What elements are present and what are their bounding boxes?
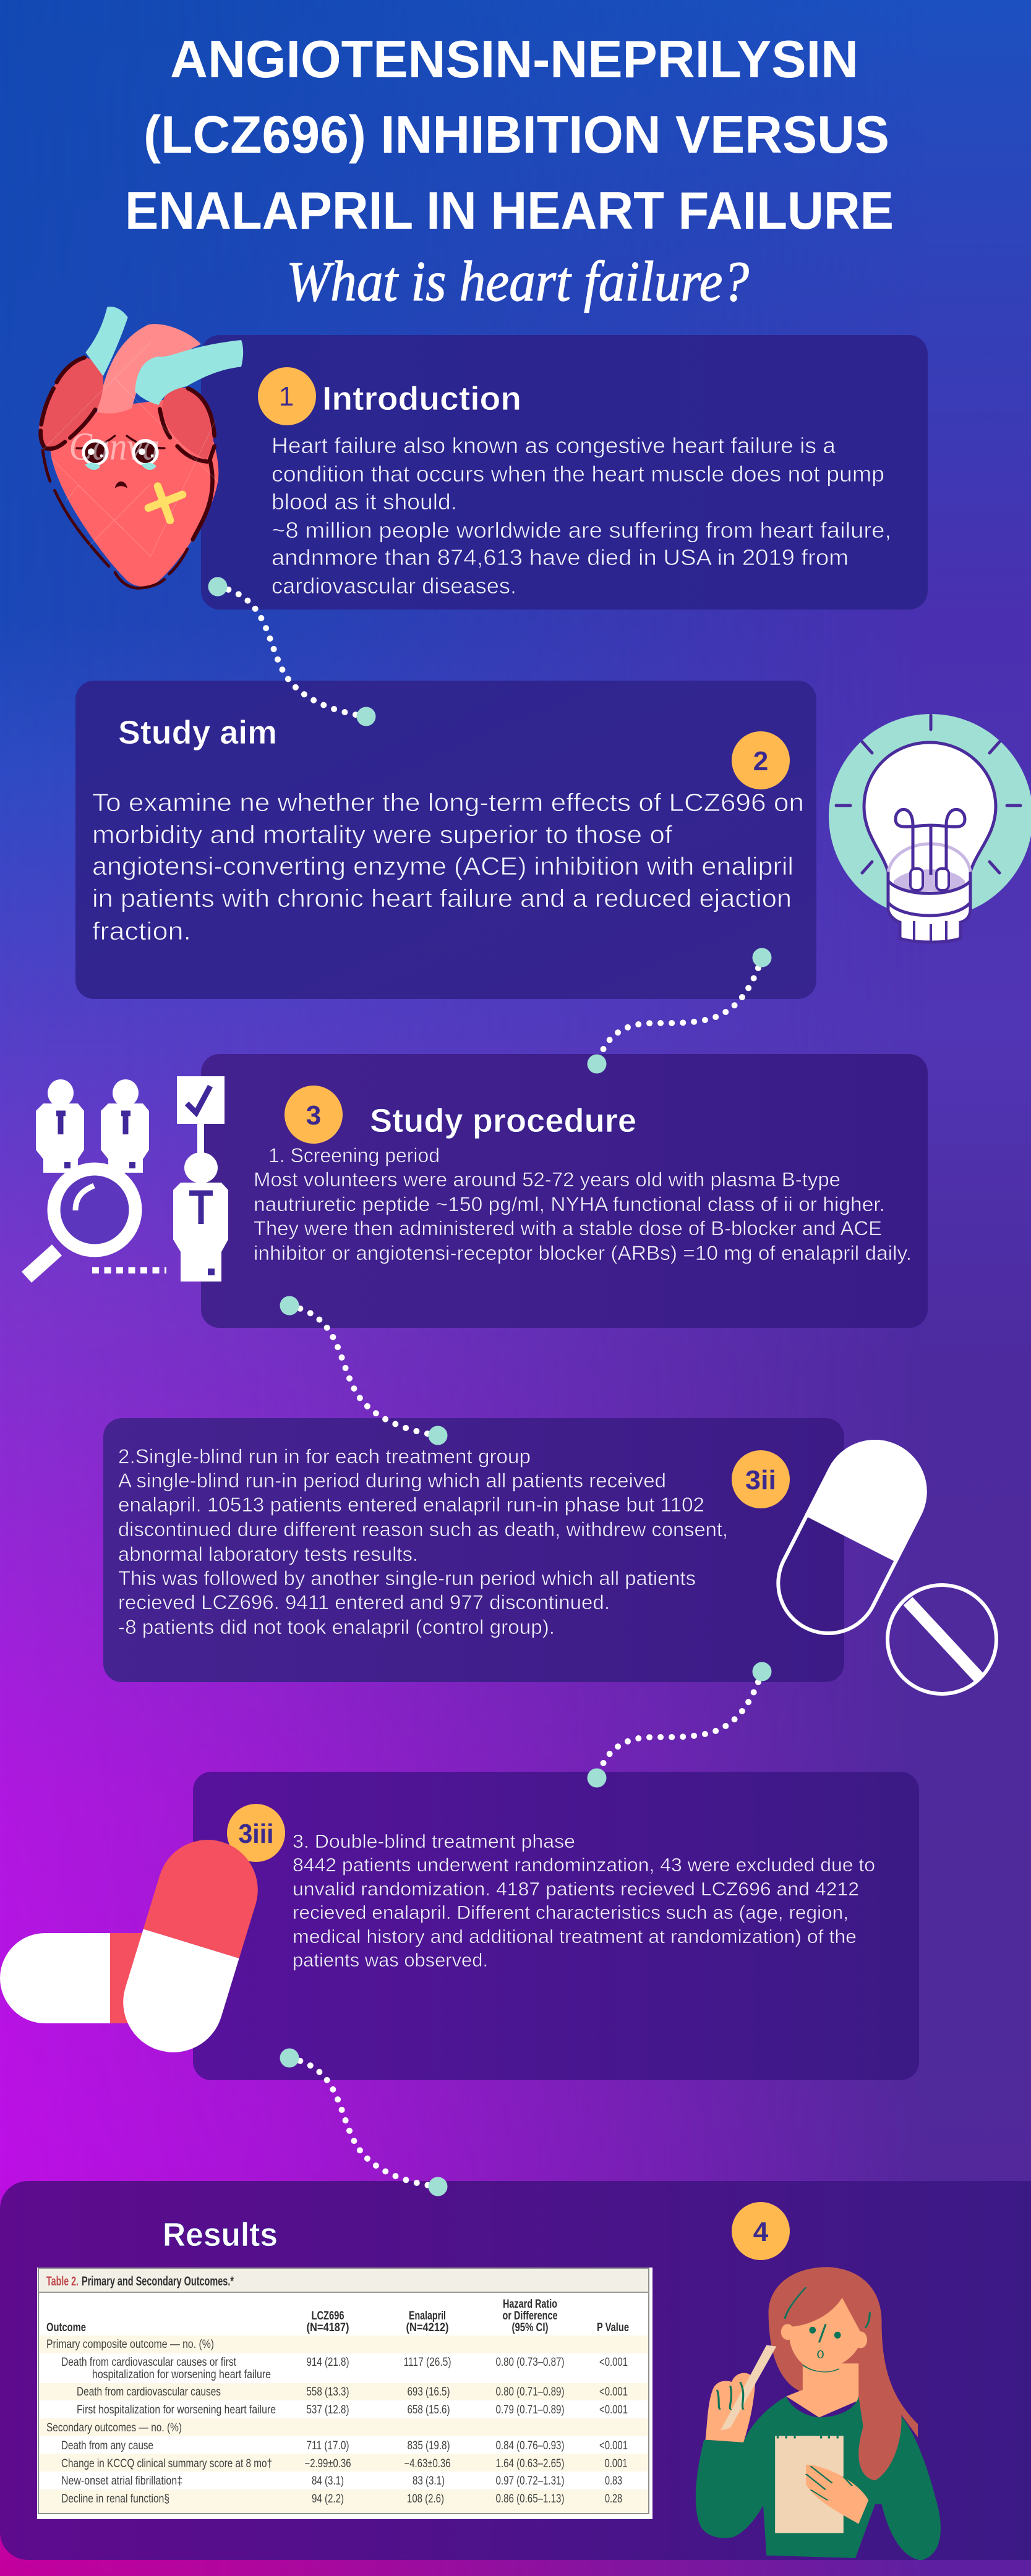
icon: people and magnifier — [27, 1076, 228, 1282]
text: screening period: nautriuretic peptide ~150 pg/ml, NYHA functional class of ii or higher. — [254, 1193, 885, 1215]
badge: 3iii — [227, 1804, 285, 1862]
text: single-blind body: enalapril. 10513 patients entered enalapril run-in phase but 1102 — [118, 1494, 704, 1516]
table: primary and secondary outcomes: (N=4187) — [307, 2321, 349, 2334]
panel: single-blind run-in — [103, 1418, 844, 1682]
table: primary and secondary outcomes: (95% CI) — [512, 2321, 548, 2334]
table: primary and secondary outcomes: 835 (19.8) — [407, 2439, 450, 2452]
text: single-blind body: -8 patients did not took enalapril (control group). — [118, 1616, 555, 1638]
text: introduction body: andnmore than 874,613 have died in USA in 2019 from — [272, 545, 849, 570]
icon: woman thinking with notepad — [696, 2267, 941, 2560]
text: introduction body: blood as it should. — [272, 489, 457, 514]
table: primary and secondary outcomes: 0.83 — [605, 2475, 622, 2488]
text: study aim body — [92, 788, 804, 945]
text: study aim body: in patients with chronic heart failure and a reduced ejaction — [92, 884, 792, 912]
text: double-blind body: unvalid randomization. 4187 patients recieved LCZ696 and 4212 — [293, 1878, 859, 1900]
heading: results: Results — [163, 2216, 278, 2253]
table: primary and secondary outcomes: <0.001 — [599, 2439, 628, 2452]
text: screening period: Most volunteers were around 52-72 years old with plasma B-type — [254, 1168, 841, 1191]
text: screening period — [254, 1144, 912, 1264]
text: double-blind body: 8442 patients underwent randominzation, 43 were excluded due to — [293, 1854, 875, 1876]
table: primary and secondary outcomes: 1117 (26.5) — [403, 2356, 451, 2369]
connector: double-blind to results — [280, 2049, 448, 2196]
table: primary and secondary outcomes: LCZ696 — [312, 2310, 344, 2323]
badge: 2: 2 — [753, 746, 768, 776]
badge: 4 — [732, 2202, 790, 2260]
table: primary and secondary outcomes: Table 2. — [46, 2274, 79, 2289]
table: primary and secondary outcomes: Enalapril — [409, 2310, 446, 2323]
table: primary and secondary outcomes: 1.64 (0.63–2.65) — [496, 2457, 564, 2470]
connector: introduction to study aim — [208, 577, 376, 726]
text: introduction body: Heart failure also known as congestive heart failure is a — [272, 433, 836, 458]
badge: 4: 4 — [753, 2217, 769, 2247]
table: primary and secondary outcomes: Secondary outcomes — no. (%) — [46, 2421, 182, 2434]
badge: 1: 1 — [279, 381, 294, 412]
badge: 3ii — [732, 1450, 790, 1508]
table: primary and secondary outcomes: 711 (17.0) — [307, 2439, 349, 2452]
badge: 3: 3 — [306, 1100, 321, 1131]
title — [125, 30, 894, 240]
icon: light bulb — [829, 714, 1031, 943]
text: single-blind body: 2.Single-blind run in for each treatment group — [118, 1445, 531, 1468]
table: primary and secondary outcomes: 0.84 (0.76–0.93) — [496, 2439, 564, 2452]
connector: single-blind to double-blind — [588, 1662, 772, 1788]
panel: study procedure — [201, 1054, 928, 1328]
text: study aim body: fraction. — [92, 917, 191, 945]
table: primary and secondary outcomes: <0.001 — [599, 2356, 628, 2369]
table: primary and secondary outcomes: hospitalization for worsening heart failure — [92, 2368, 271, 2381]
table: primary and secondary outcomes: Primary and Secondary Outcomes.* — [82, 2274, 234, 2289]
text: screening period: inhibitor or angiotensi-receptor blocker (ARBs) =10 mg of enalapril daily. — [254, 1242, 912, 1264]
table: primary and secondary outcomes: or Difference — [502, 2310, 558, 2323]
table: primary and secondary outcomes: 0.28 — [605, 2493, 622, 2506]
text: double-blind body: recieved enalapril. Different characteristics such as (age, region, — [293, 1902, 849, 1923]
title: (LCZ696) INHIBITION VERSUS — [143, 106, 889, 164]
table: primary and secondary outcomes: Hazard Ratio — [503, 2298, 557, 2311]
heading: study procedure: Study procedure — [370, 1102, 636, 1139]
panel: introduction — [201, 335, 928, 610]
table: primary and secondary outcomes: 0.001 — [605, 2457, 627, 2470]
text: single-blind body: recieved LCZ696. 9411 entered and 977 discontinued. — [118, 1591, 610, 1613]
table: primary and secondary outcomes: 94 (2.2) — [312, 2493, 344, 2506]
title: ENALAPRIL IN HEART FAILURE — [125, 182, 894, 240]
subtitle: What is heart failure? — [286, 250, 749, 313]
panel: results — [0, 2181, 1031, 2560]
table: primary and secondary outcomes: 108 (2.6) — [407, 2493, 444, 2506]
badge: 2 — [732, 731, 790, 789]
table: primary and secondary outcomes: Change in KCCQ clinical summary score at 8 mo† — [61, 2457, 272, 2470]
text: double-blind body: patients was observed. — [293, 1949, 488, 1971]
icon: capsule and round pill — [759, 1422, 996, 1694]
table: primary and secondary outcomes: Decline in renal function§ — [61, 2493, 169, 2506]
table: primary and secondary outcomes: Death from any cause — [61, 2439, 153, 2452]
table: primary and secondary outcomes: <0.001 — [599, 2386, 628, 2399]
text: introduction body — [272, 433, 891, 598]
text: introduction body: cardiovascular diseases. — [272, 573, 516, 598]
table: primary and secondary outcomes: 0.86 (0.65–1.13) — [496, 2493, 564, 2506]
text: double-blind body: medical history and additional treatment at randomization) of the — [293, 1926, 857, 1947]
text: single-blind body — [118, 1445, 728, 1638]
text: single-blind body: This was followed by another single-run period which all patients — [118, 1567, 696, 1589]
table: primary and secondary outcomes: 914 (21.8) — [307, 2356, 349, 2369]
text: study aim body: To examine ne whether the long-term effects of LCZ696 on — [92, 788, 804, 817]
table: primary and secondary outcomes: 0.97 (0.72–1.31) — [496, 2475, 564, 2488]
panel: double-blind treatment — [193, 1772, 919, 2080]
table: primary and secondary outcomes: First hospitalization for worsening heart failure — [77, 2404, 276, 2417]
table: primary and secondary outcomes: (N=4212) — [406, 2321, 449, 2334]
icon: sad heart: Canva — [69, 425, 160, 468]
text: single-blind body: abnormal laboratory tests results. — [118, 1543, 418, 1565]
title: ANGIOTENSIN-NEPRILYSIN — [170, 30, 858, 89]
table: primary and secondary outcomes — [37, 2268, 652, 2519]
table: primary and secondary outcomes: 83 (3.1) — [413, 2475, 445, 2488]
table: primary and secondary outcomes: Death from cardiovascular causes — [77, 2386, 221, 2399]
badge: 1 — [258, 367, 316, 425]
text: single-blind body: discontinued dure different reason such as death, withdrew consent, — [118, 1518, 728, 1541]
text: study aim body: morbidity and mortality were superior to those of — [92, 820, 673, 849]
icon: red and white capsules — [0, 1827, 270, 2065]
badge: 3ii: 3ii — [745, 1465, 776, 1495]
icon: sad heart — [39, 307, 243, 588]
heading: introduction: Introduction — [322, 380, 521, 417]
table: primary and secondary outcomes: Outcome — [46, 2321, 86, 2334]
table: primary and secondary outcomes: P Value — [597, 2321, 629, 2334]
text: screening period: They were then administered with a stable dose of B-blocker and ACE — [254, 1217, 882, 1239]
panel: study aim — [75, 681, 816, 999]
connector: procedure to single-blind — [280, 1296, 448, 1445]
badge: 3iii: 3iii — [239, 1819, 273, 1849]
heading: study aim: Study aim — [118, 714, 277, 751]
table: primary and secondary outcomes: 693 (16.5) — [407, 2386, 450, 2399]
table: primary and secondary outcomes: New-onset atrial fibrillation‡ — [61, 2475, 182, 2488]
text: double-blind body — [293, 1830, 875, 1971]
table: primary and secondary outcomes: Death from cardiovascular causes or first — [61, 2356, 237, 2369]
table: primary and secondary outcomes: 84 (3.1) — [312, 2475, 344, 2488]
badge: 3 — [284, 1086, 343, 1144]
text: screening period: 1. Screening period — [268, 1144, 440, 1167]
table: primary and secondary outcomes: 558 (13.3) — [307, 2386, 349, 2399]
table: primary and secondary outcomes: 658 (15.6) — [407, 2404, 450, 2417]
table: primary and secondary outcomes: <0.001 — [599, 2404, 628, 2417]
table: primary and secondary outcomes: 537 (12.8) — [307, 2404, 349, 2417]
table: primary and secondary outcomes: Primary composite outcome — no. (%) — [46, 2338, 214, 2351]
text: study aim body: angiotensi-converting enzyme (ACE) inhibition with enalipril — [92, 852, 794, 880]
table: primary and secondary outcomes: 0.80 (0.73–0.87) — [496, 2356, 564, 2369]
table: primary and secondary outcomes: −4.63±0.36 — [404, 2457, 450, 2470]
table: primary and secondary outcomes: 0.80 (0.71–0.89) — [496, 2386, 564, 2399]
table: primary and secondary outcomes: −2.99±0.36 — [304, 2457, 351, 2470]
text: double-blind body: 3. Double-blind treatment phase — [293, 1830, 575, 1852]
connector: study aim to procedure — [588, 948, 772, 1073]
text: introduction body: ~8 million people worldwide are suffering from heart failure, — [272, 517, 891, 543]
text: single-blind body: A single-blind run-in period during which all patients received — [118, 1469, 666, 1492]
text: introduction body: condition that occurs when the heart muscle does not pump — [272, 461, 884, 487]
table: primary and secondary outcomes: 0.79 (0.71–0.89) — [496, 2404, 564, 2417]
